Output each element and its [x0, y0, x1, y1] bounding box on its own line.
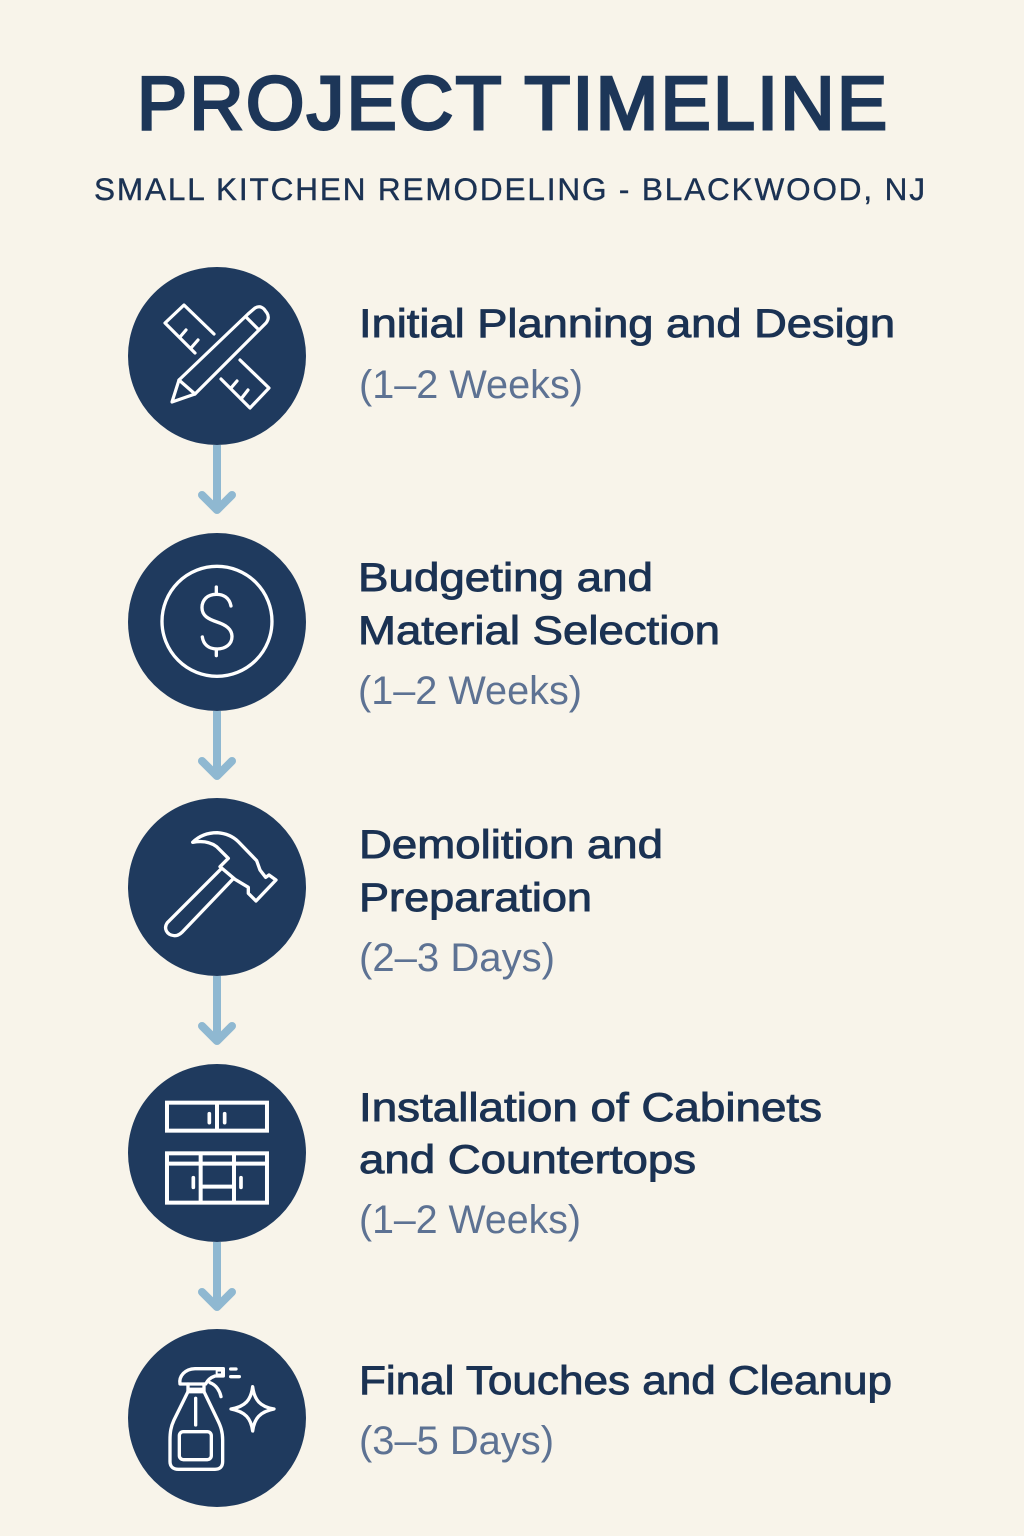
step 2 heading: Budgeting and [358, 556, 653, 600]
icon: hammer [128, 798, 306, 976]
arrow 3 [202, 976, 232, 1041]
arrow 2 [202, 711, 232, 776]
step 3: demolition and preparation [128, 798, 663, 980]
icon: kitchen cabinets [128, 1064, 306, 1242]
subtitle: SMALL KITCHEN REMODELING - BLACKWOOD, NJ [94, 171, 925, 207]
step 1: initial planning and design [128, 267, 895, 445]
step 4: installation of cabinets and countertops: and Countertops [359, 1138, 696, 1182]
step 5: final touches and cleanup [128, 1329, 892, 1507]
step 2 duration: (1–2 Weeks) [358, 669, 582, 713]
step 4 heading: Installation of Cabinets [359, 1086, 822, 1130]
step 2: budgeting and material selection [128, 533, 720, 713]
arrow 4 [202, 1242, 232, 1307]
icon: dollar coin [128, 533, 306, 711]
step 2: budgeting and material selection: Material Selection [358, 609, 720, 653]
step 4: installation of cabinets and countertops [128, 1064, 822, 1242]
step 5 heading: Final Touches and Cleanup [359, 1359, 892, 1403]
arrow 1 [202, 445, 232, 510]
title: PROJECT TIMELINE [137, 61, 887, 145]
step 5 duration: (3–5 Days) [359, 1419, 554, 1463]
step 1 duration: (1–2 Weeks) [359, 363, 583, 407]
step 3: demolition and preparation: Preparation [359, 876, 592, 920]
step 3 heading: Demolition and [359, 823, 663, 867]
step 3 duration: (2–3 Days) [359, 936, 555, 980]
icon: spray bottle and sparkle [128, 1329, 306, 1507]
icon: pencil and ruler [128, 267, 306, 445]
step 4 duration: (1–2 Weeks) [359, 1198, 581, 1242]
step 1 heading: Initial Planning and Design [359, 302, 895, 346]
